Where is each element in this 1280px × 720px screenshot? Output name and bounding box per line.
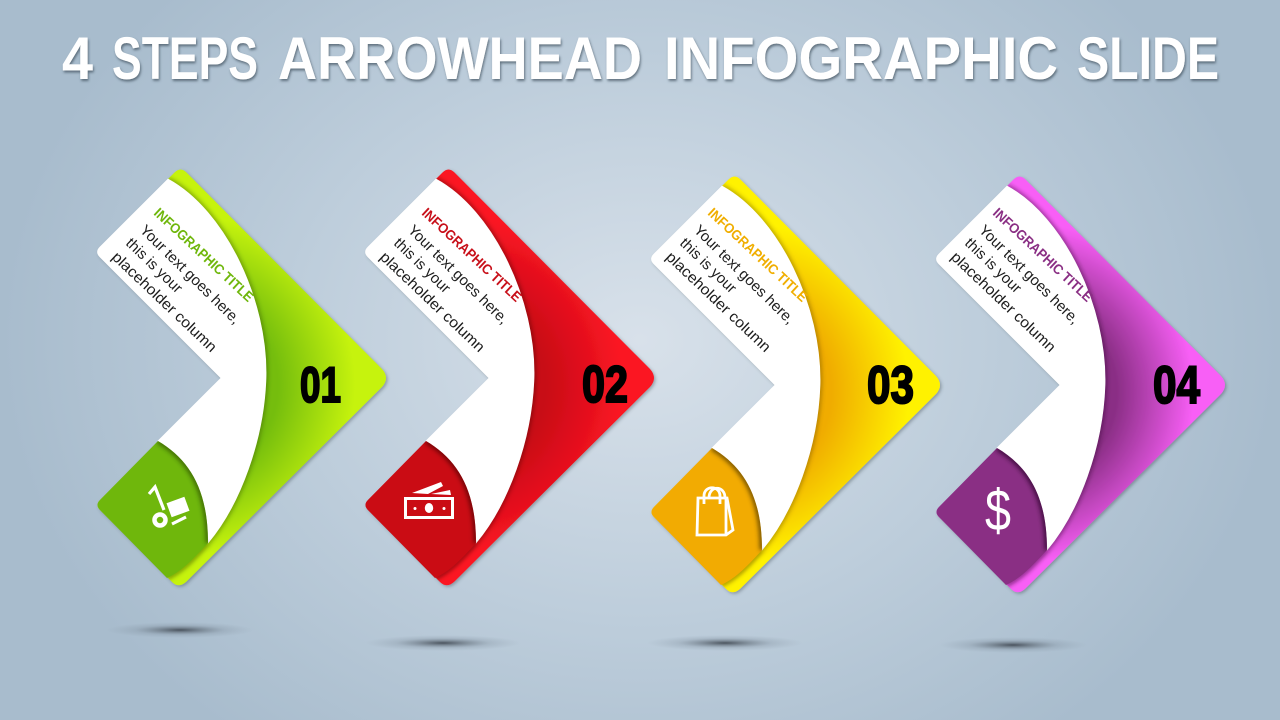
step 2 text (376, 204, 525, 356)
arc shadow on red (436, 179, 534, 543)
step 3 body: this is your (676, 235, 740, 297)
icon corner: purple (936, 448, 1047, 585)
number 01: 01 (300, 357, 341, 413)
floor shadow 3 (647, 635, 803, 651)
floor shadow 2 (365, 635, 521, 651)
floor shadow 1 (106, 622, 254, 638)
corner shadow on yellow (721, 550, 762, 585)
step 2 body (376, 222, 512, 356)
step 3 body: placeholder column (662, 249, 774, 356)
step 1 heading: INFOGRAPHIC TITLE (151, 204, 257, 305)
chevron back: yellow (652, 176, 940, 592)
title: SLIDE (1077, 25, 1219, 92)
step 2 body: Your text goes here, (404, 222, 512, 328)
white text panel (98, 179, 266, 543)
icon corner: amber (652, 448, 762, 585)
step 2 body: this is your (390, 235, 454, 297)
arc shadow on lime (168, 179, 266, 543)
title: STEPS (112, 25, 258, 92)
title: INFOGRAPHIC (664, 25, 1058, 92)
corner inner shadow (997, 448, 1047, 550)
step 1 body (108, 222, 244, 356)
arc shadow on pink (1007, 186, 1105, 550)
title: ARROWHEAD (278, 25, 642, 92)
step 3 body: Your text goes here, (690, 222, 798, 328)
step 4 body: placeholder column (947, 249, 1059, 356)
chevron back: red (366, 170, 654, 585)
chevron back: pink (936, 176, 1225, 592)
step 3 arrowhead (652, 176, 940, 592)
step 1 body: this is your (122, 235, 186, 297)
number 03: 03 (867, 356, 914, 415)
icon: banknotes (404, 482, 454, 519)
step 4 body: this is your (961, 235, 1025, 297)
step 3 text (662, 204, 811, 356)
title: 4 (62, 25, 94, 92)
white text panel (936, 186, 1105, 550)
chevron back: lime (98, 170, 386, 585)
corner shadow on red (435, 543, 476, 578)
icon corner: green (98, 441, 208, 578)
icon: shopping bag (697, 488, 733, 535)
step 1 body: placeholder column (108, 249, 220, 356)
number 02: 02 (582, 356, 628, 414)
number 04: 04 (1153, 356, 1200, 415)
step 3 heading: INFOGRAPHIC TITLE (705, 204, 811, 305)
white text panel (652, 186, 820, 550)
floor shadow 4 (939, 637, 1087, 653)
corner inner shadow (158, 441, 208, 543)
corner shadow on lime (167, 543, 208, 578)
step 2 body: placeholder column (376, 249, 488, 356)
title (62, 25, 1219, 92)
step 4 arrowhead (936, 176, 1225, 592)
icon: dollar sign: $ (985, 478, 1011, 543)
step 1 text (108, 204, 257, 356)
icon corner: dark red (366, 441, 476, 578)
white text panel (366, 179, 534, 543)
icon: hand truck (149, 487, 189, 526)
step 2 arrowhead (366, 170, 654, 585)
step 2 heading: INFOGRAPHIC TITLE (419, 204, 525, 305)
corner shadow on pink (1006, 550, 1047, 585)
corner inner shadow (712, 448, 762, 550)
step 3 body (662, 222, 798, 356)
arc shadow on yellow (722, 186, 820, 550)
step 4 heading: INFOGRAPHIC TITLE (990, 204, 1096, 305)
step 4 text (947, 204, 1096, 356)
step 4 body (947, 222, 1083, 356)
step 1 body: Your text goes here, (136, 222, 244, 328)
corner inner shadow (426, 441, 476, 543)
step 1 arrowhead (98, 170, 386, 585)
step 4 body: Your text goes here, (975, 222, 1083, 328)
